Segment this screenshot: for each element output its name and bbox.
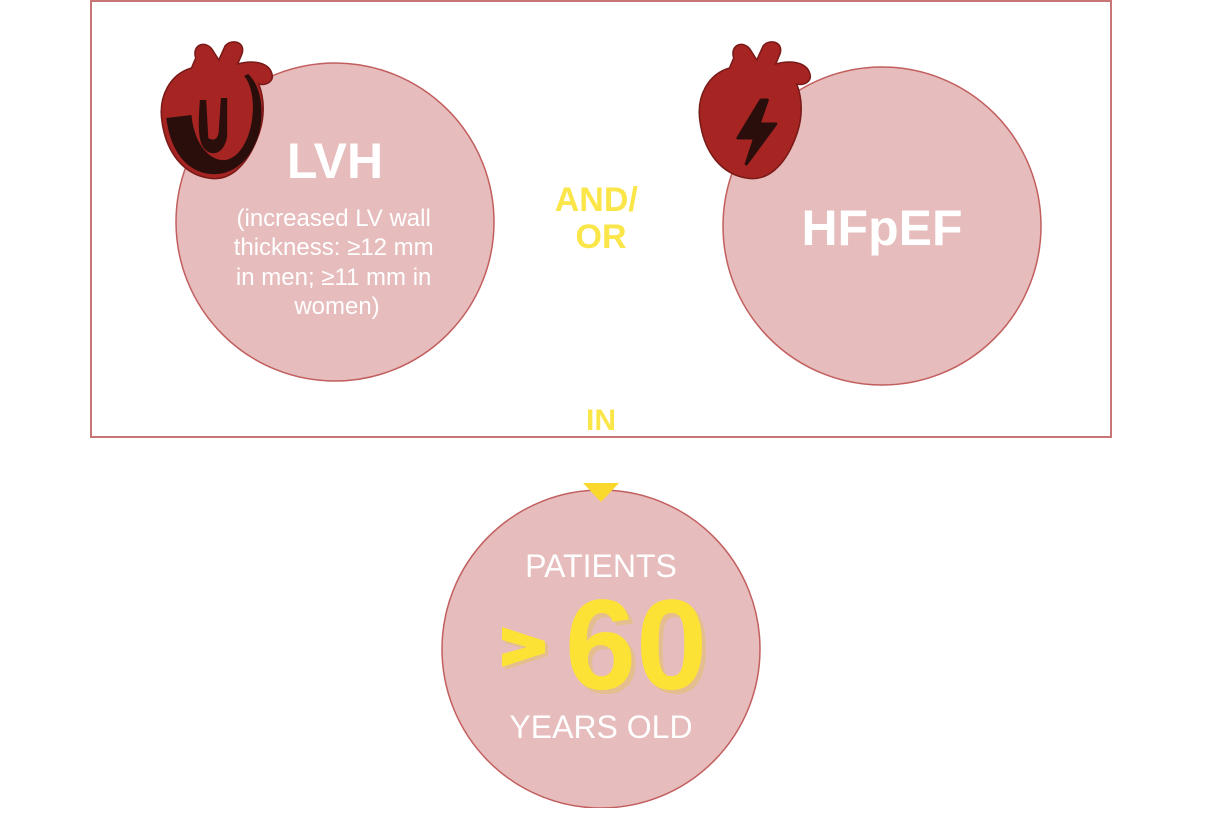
text: IN connector: IN (586, 404, 616, 437)
text: >60: 60 (565, 574, 707, 717)
circle: patients age (442, 490, 760, 808)
icon: heart with lightning (699, 42, 810, 179)
heading: LVH: LVH (287, 133, 383, 189)
icon: heart with thick wall (161, 42, 272, 179)
text: LVH definition: in men; ≥11 mm in (236, 264, 431, 291)
text: PATIENTS: PATIENTS (525, 548, 677, 584)
arrow: yellow triangle (583, 483, 619, 502)
text: AND/OR connector: AND/ (555, 181, 638, 219)
panel: conditions box (91, 1, 1111, 437)
text: LVH definition: women) (293, 293, 380, 320)
text: YEARS OLD: YEARS OLD (509, 709, 693, 745)
circle: LVH (176, 63, 494, 381)
text: LVH definition: (increased LV wall (237, 205, 431, 232)
circle: HFpEF (723, 67, 1041, 385)
text: >60: 60 (569, 578, 711, 721)
text: AND/OR connector: OR (576, 218, 626, 256)
text: LVH definition: thickness: ≥12 mm (234, 234, 434, 261)
heading: HFpEF: HFpEF (801, 200, 963, 256)
text: >60 (502, 574, 711, 721)
